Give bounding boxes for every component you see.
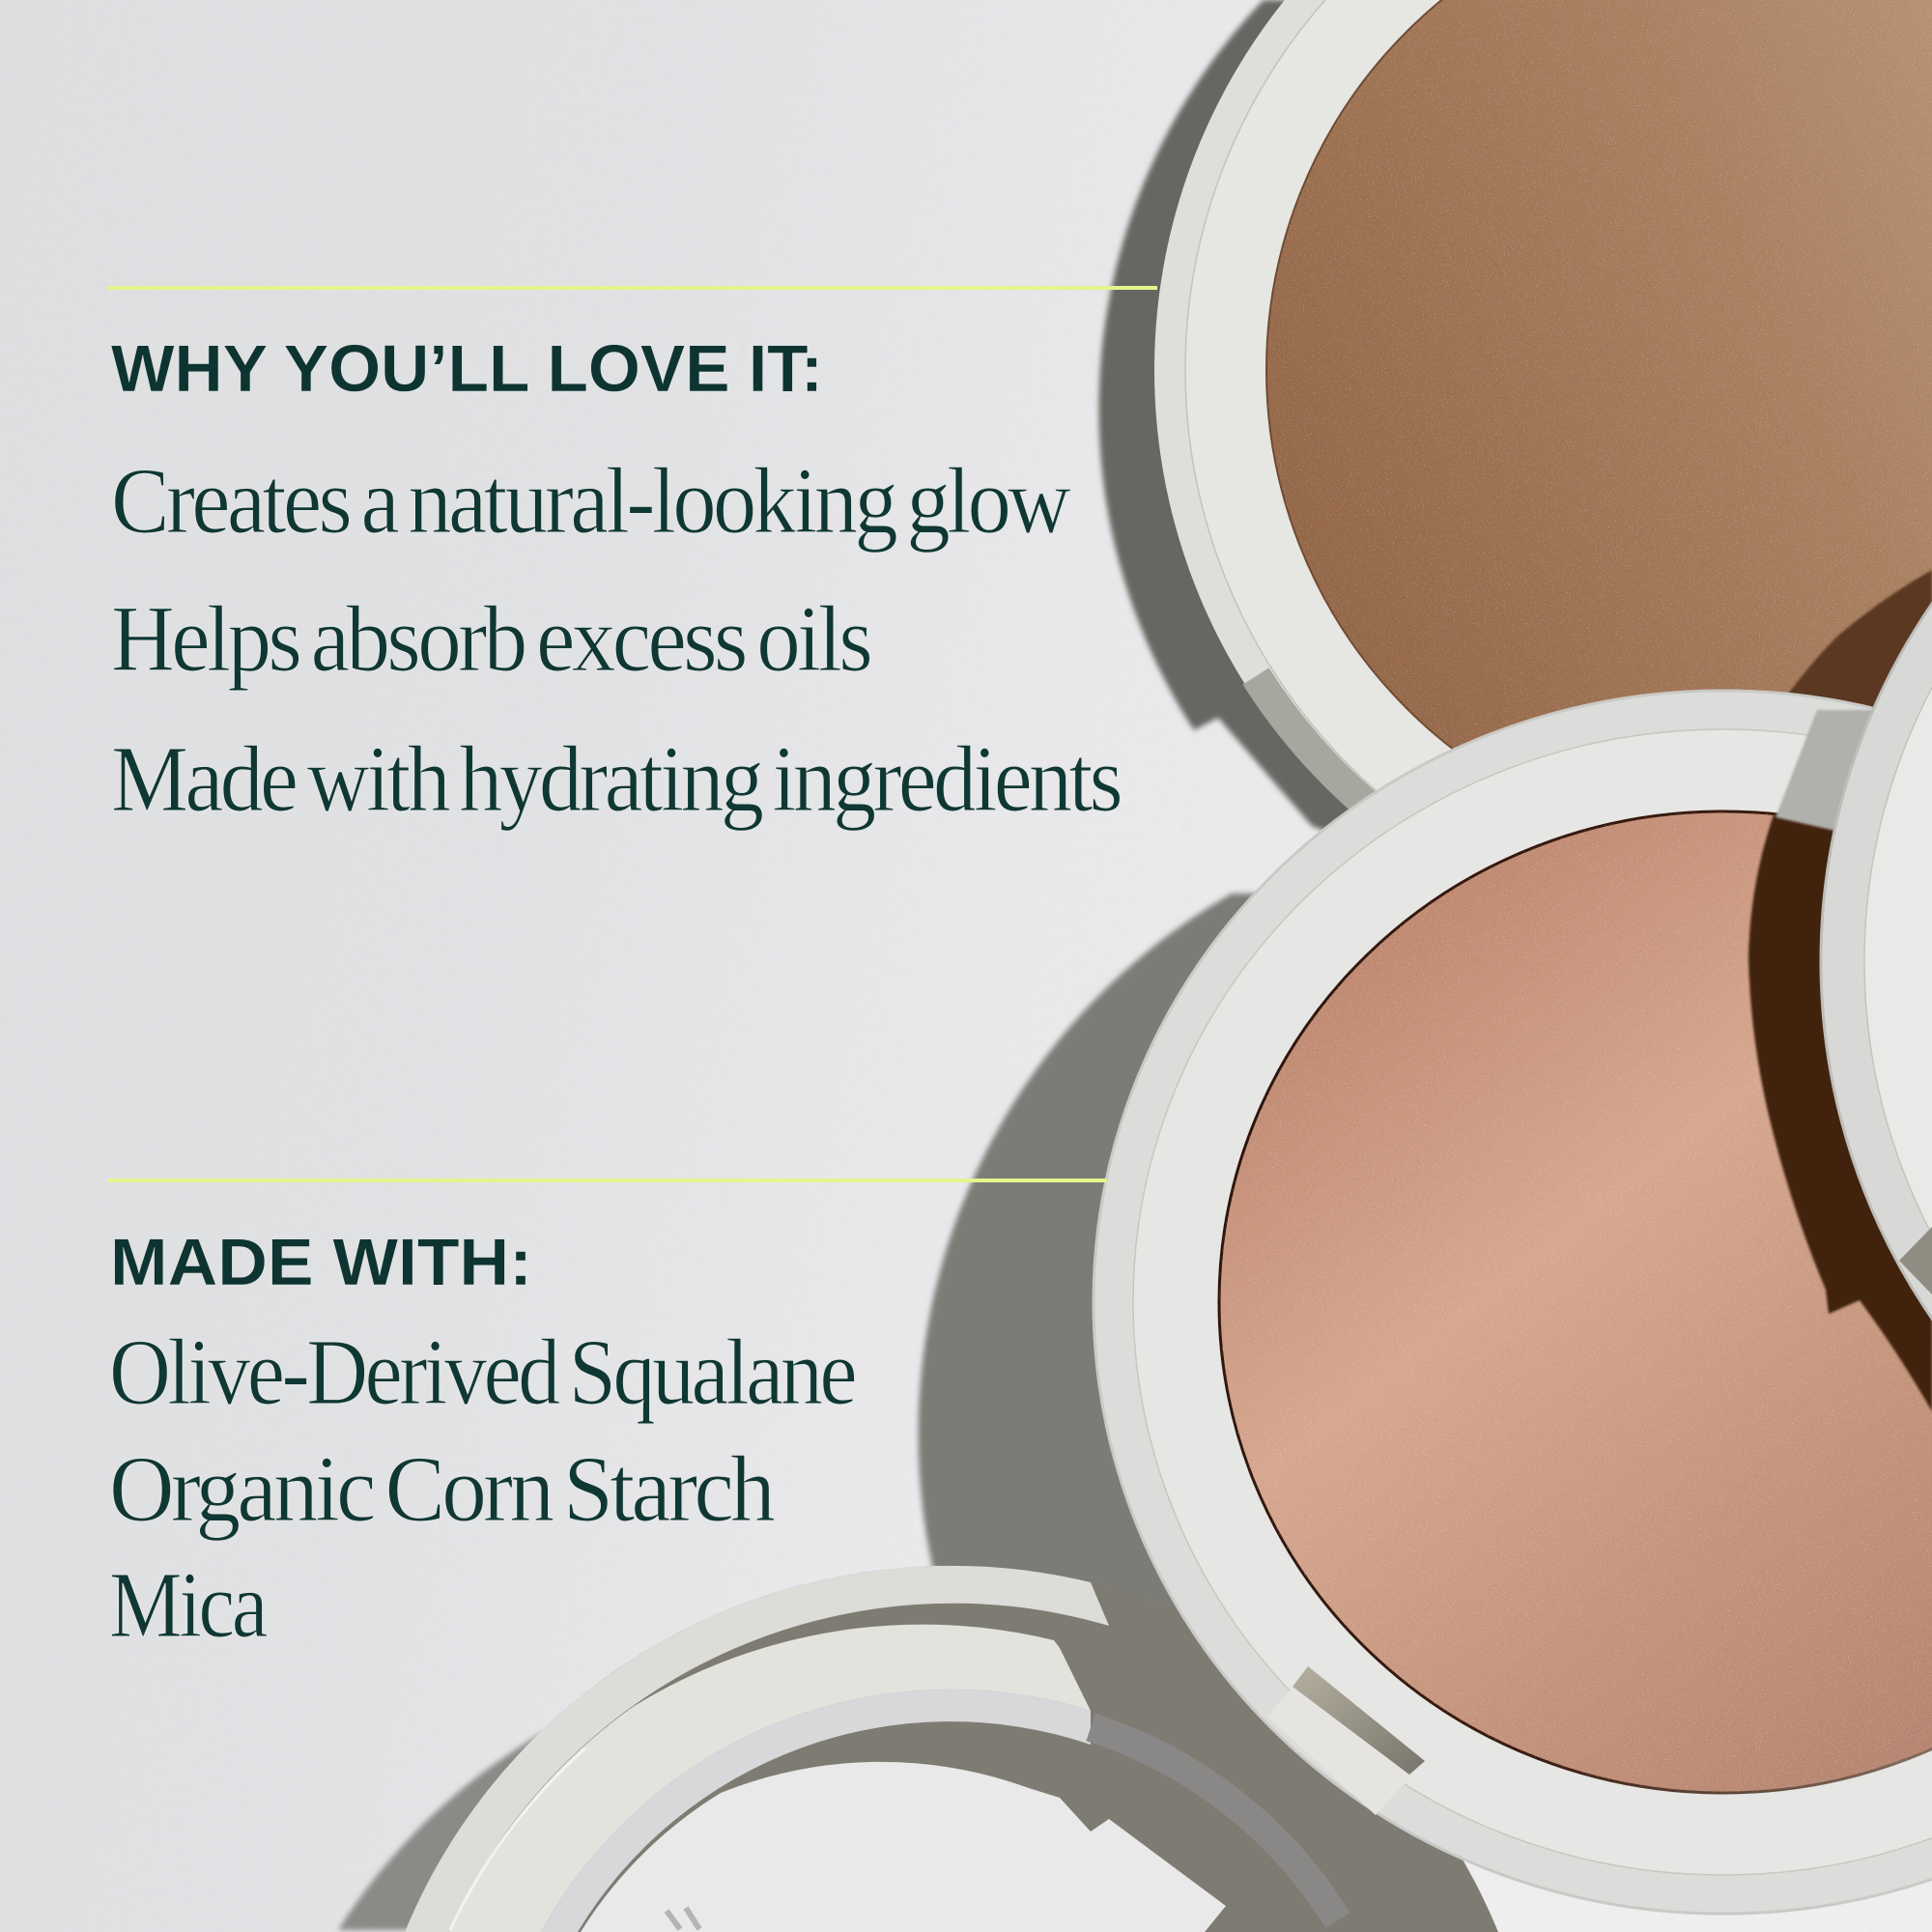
- benefit 3: Made with hydrating ingredients: [111, 727, 1121, 831]
- rule: top: [107, 286, 1157, 290]
- ingredient 3: Mica: [109, 1553, 268, 1657]
- lid recess shadow: [405, 1566, 1498, 1932]
- ingredient 1: Olive-Derived Squalane: [109, 1321, 855, 1424]
- heading: WHY YOU’LL LOVE IT:: [111, 331, 823, 406]
- compact rim: [1821, 330, 1932, 1592]
- blush pan: [1219, 811, 1932, 1793]
- paper insert: [581, 1762, 1226, 1932]
- clear ring: [541, 1690, 1091, 1932]
- hinge strip: [1256, 676, 1378, 814]
- shadow: middle compact: [919, 894, 1449, 1662]
- section: made with: [109, 1225, 855, 1657]
- compact: right edge: [1821, 330, 1932, 1592]
- compact: bottom open lid: [405, 1566, 1498, 1932]
- cast shadow on blush pan: [1748, 810, 1932, 1411]
- clear ring in shadow: [1091, 1727, 1338, 1920]
- compact inner ring: [1133, 729, 1932, 1875]
- benefit 2: Helps absorb excess oils: [111, 587, 870, 691]
- lid outer rim: [405, 1566, 1109, 1932]
- section: why you'll love it: [111, 331, 1121, 831]
- compact inner ring: [1184, 0, 1377, 790]
- hinge tab: [1267, 1666, 1425, 1815]
- benefit 1: Creates a natural-looking glow: [111, 449, 1071, 553]
- compact inner ring: [1864, 374, 1932, 1548]
- shadow: bottom compact: [338, 1731, 546, 1930]
- compact: top bronzer: [1154, 0, 1932, 810]
- compact rim: [1094, 691, 1932, 1914]
- cast shadow on bronzer pan: [1788, 569, 1932, 707]
- bronzer pan: [1265, 0, 1932, 750]
- insert logo mark: [667, 1908, 699, 1929]
- shadow: top compact: [1099, 0, 1449, 850]
- compact rim: [1154, 0, 1376, 791]
- pan shimmer: [1219, 811, 1932, 1797]
- rule: bottom: [107, 1179, 1107, 1182]
- cast shadow on rim: [1776, 710, 1874, 831]
- ingredient 2: Organic Corn Starch: [109, 1437, 775, 1541]
- lid edge highlight: [450, 1748, 585, 1930]
- hinge gap: [1899, 1227, 1932, 1294]
- compact: middle blush: [1094, 691, 1932, 1914]
- pan shimmer: [1266, 0, 1932, 749]
- heading: MADE WITH:: [110, 1225, 532, 1299]
- lid lit body: [449, 1625, 1091, 1932]
